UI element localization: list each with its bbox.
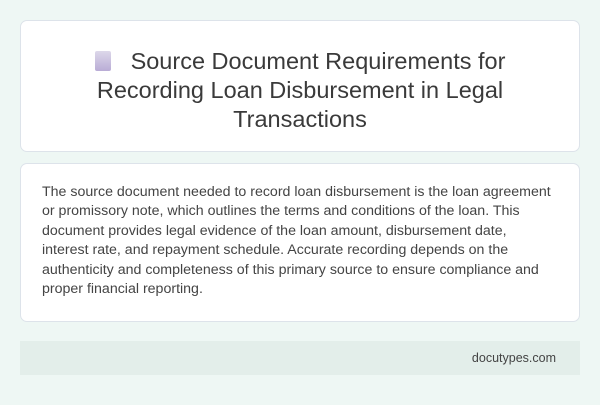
footer: docutypes.com xyxy=(472,351,556,365)
title: Recording Loan Disbursement in Legal xyxy=(97,77,503,103)
text block: or promissory note, which outlines the terms and conditions of the loan. This xyxy=(42,203,520,219)
title: Transactions xyxy=(233,106,367,132)
text block: interest rate, and repayment schedule. Accurate recording depends on the xyxy=(42,242,508,258)
text block: document provides legal evidence of the loan amount, disbursement date, xyxy=(42,223,507,239)
text block: authenticity and completeness of this primary source to ensure compliance and xyxy=(42,262,539,278)
panel: title card xyxy=(20,20,580,152)
panel: description xyxy=(20,163,580,322)
title: Source Document Requirements for xyxy=(131,48,505,74)
title xyxy=(95,48,506,132)
text block: The source document needed to record loan disbursement is the loan agreement xyxy=(42,184,551,200)
text block: proper financial reporting. xyxy=(42,281,203,297)
footer xyxy=(20,341,580,375)
text block xyxy=(42,184,551,297)
